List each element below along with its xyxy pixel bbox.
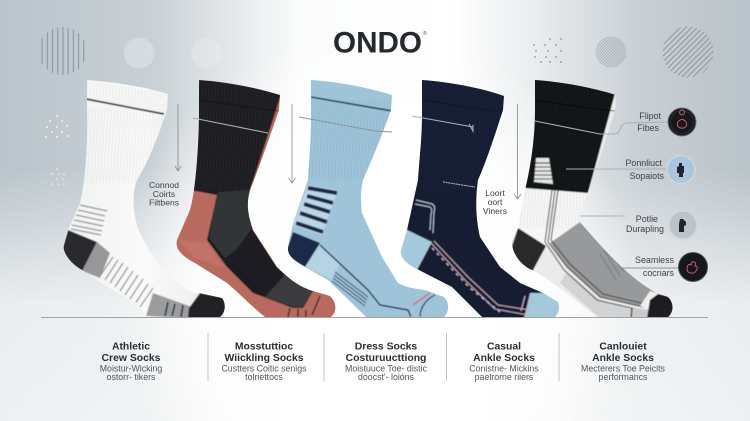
column: dress socks: Dress Socks xyxy=(355,342,417,352)
title: ® xyxy=(423,30,427,37)
column: dress socks: Moistuuce Toe- distic xyxy=(345,364,428,374)
sock: athletic crew xyxy=(64,80,225,317)
divider xyxy=(323,333,325,381)
column: athletic crew socks: Athletic xyxy=(112,342,150,352)
label: potlie durapling: Durapling xyxy=(626,224,664,234)
column: casual ankle socks: paelrorne riiers xyxy=(475,372,534,382)
column: moisture wicking socks: Mosstuttioc xyxy=(235,342,293,352)
callout line: navy sock band xyxy=(412,116,473,131)
label: seamless cocnars: Seamless xyxy=(635,255,675,265)
column: canlouet ankle socks: performancs xyxy=(599,372,648,382)
column: moisture wicking socks: Custters Coitic senigs xyxy=(221,364,307,374)
sock: canlouet ankle xyxy=(512,80,672,317)
label: potlie durapling: Potlie xyxy=(636,214,658,224)
decorative pattern: faint hatched circle xyxy=(191,38,221,68)
label: cotton fibers: Filtbens xyxy=(149,198,179,208)
label: loort viners: oort xyxy=(488,197,503,207)
label: flipot fibes: Fibes xyxy=(637,123,660,133)
arrow: black sock xyxy=(288,104,296,183)
column: athletic crew socks xyxy=(100,342,162,382)
column: athletic crew socks: Moistur-Wicking xyxy=(100,364,162,374)
sock: dress xyxy=(288,80,448,317)
decorative pattern: fine hatched circle xyxy=(124,38,154,68)
label: cotton fibers: Coirts xyxy=(153,189,175,199)
divider xyxy=(558,333,560,381)
label: flipot fibes: Flipot xyxy=(639,111,662,121)
icon: dark fibres xyxy=(668,108,696,136)
arrow: white sock xyxy=(175,104,181,171)
label: seamless cocnars: cocnars xyxy=(643,268,675,278)
label: ponnliuct sopaiots: Sopaiots xyxy=(629,171,665,181)
title: ONDO xyxy=(333,26,422,60)
column: canlouet ankle socks: Canlouiet xyxy=(599,342,647,352)
baseline xyxy=(41,316,708,318)
column: dress socks: Costuruucttiong xyxy=(346,353,426,364)
column: athletic crew socks: ostorr- tikers xyxy=(107,372,156,382)
decorative pattern: vertical line circle xyxy=(38,27,86,75)
icon: dark seam xyxy=(678,252,708,282)
column: moisture wicking socks xyxy=(221,342,307,382)
decorative pattern: diagonal hatched circle xyxy=(662,26,714,78)
callout line: navy lower band xyxy=(443,182,475,187)
column: moisture wicking socks: tolriettocs xyxy=(245,372,283,382)
label: ponnliuct sopaiots: Ponnliuct xyxy=(625,158,663,168)
icon: grey figure xyxy=(669,211,697,239)
column: athletic crew socks: Crew Socks xyxy=(102,353,161,364)
sock: moisture wicking xyxy=(176,80,336,317)
column: casual ankle socks: Casual xyxy=(487,342,521,352)
decorative pattern: grey dots upper right xyxy=(533,38,562,63)
callout line: fibers xyxy=(535,121,669,134)
label: loort viners: Viners xyxy=(483,206,507,216)
column: casual ankle socks: Ankle Socks xyxy=(473,353,535,364)
callout line: durability xyxy=(580,215,625,217)
decorative pattern: white dots lower left xyxy=(51,168,65,185)
column: moisture wicking socks: Wiickling Socks xyxy=(224,353,304,364)
column: dress socks xyxy=(345,342,428,382)
arrow: navy sock xyxy=(514,104,521,199)
callout line: product supports xyxy=(566,168,668,170)
column: canlouet ankle socks xyxy=(581,342,666,382)
callout line: black sock band xyxy=(193,118,268,133)
divider xyxy=(207,333,209,381)
callout line: seamless xyxy=(616,267,680,269)
label: loort viners: Loort xyxy=(485,188,505,198)
column: dress socks: doocst'- loións xyxy=(358,372,415,382)
callout line: blue sock band xyxy=(299,117,392,132)
column: canlouet ankle socks: Mecterers Toe Peicits xyxy=(581,364,666,374)
icon: blue figure xyxy=(667,156,695,184)
sock: casual ankle xyxy=(400,80,559,317)
divider xyxy=(446,333,448,381)
column: casual ankle socks: Conistne- Mickins xyxy=(469,364,539,374)
decorative pattern: white dots upper left xyxy=(45,115,69,138)
column: casual ankle socks xyxy=(469,342,539,382)
label: cotton fibers: Connod xyxy=(149,180,179,190)
decorative pattern: fine hatched circle right xyxy=(596,36,626,68)
column: canlouet ankle socks: Ankle Socks xyxy=(592,353,654,364)
